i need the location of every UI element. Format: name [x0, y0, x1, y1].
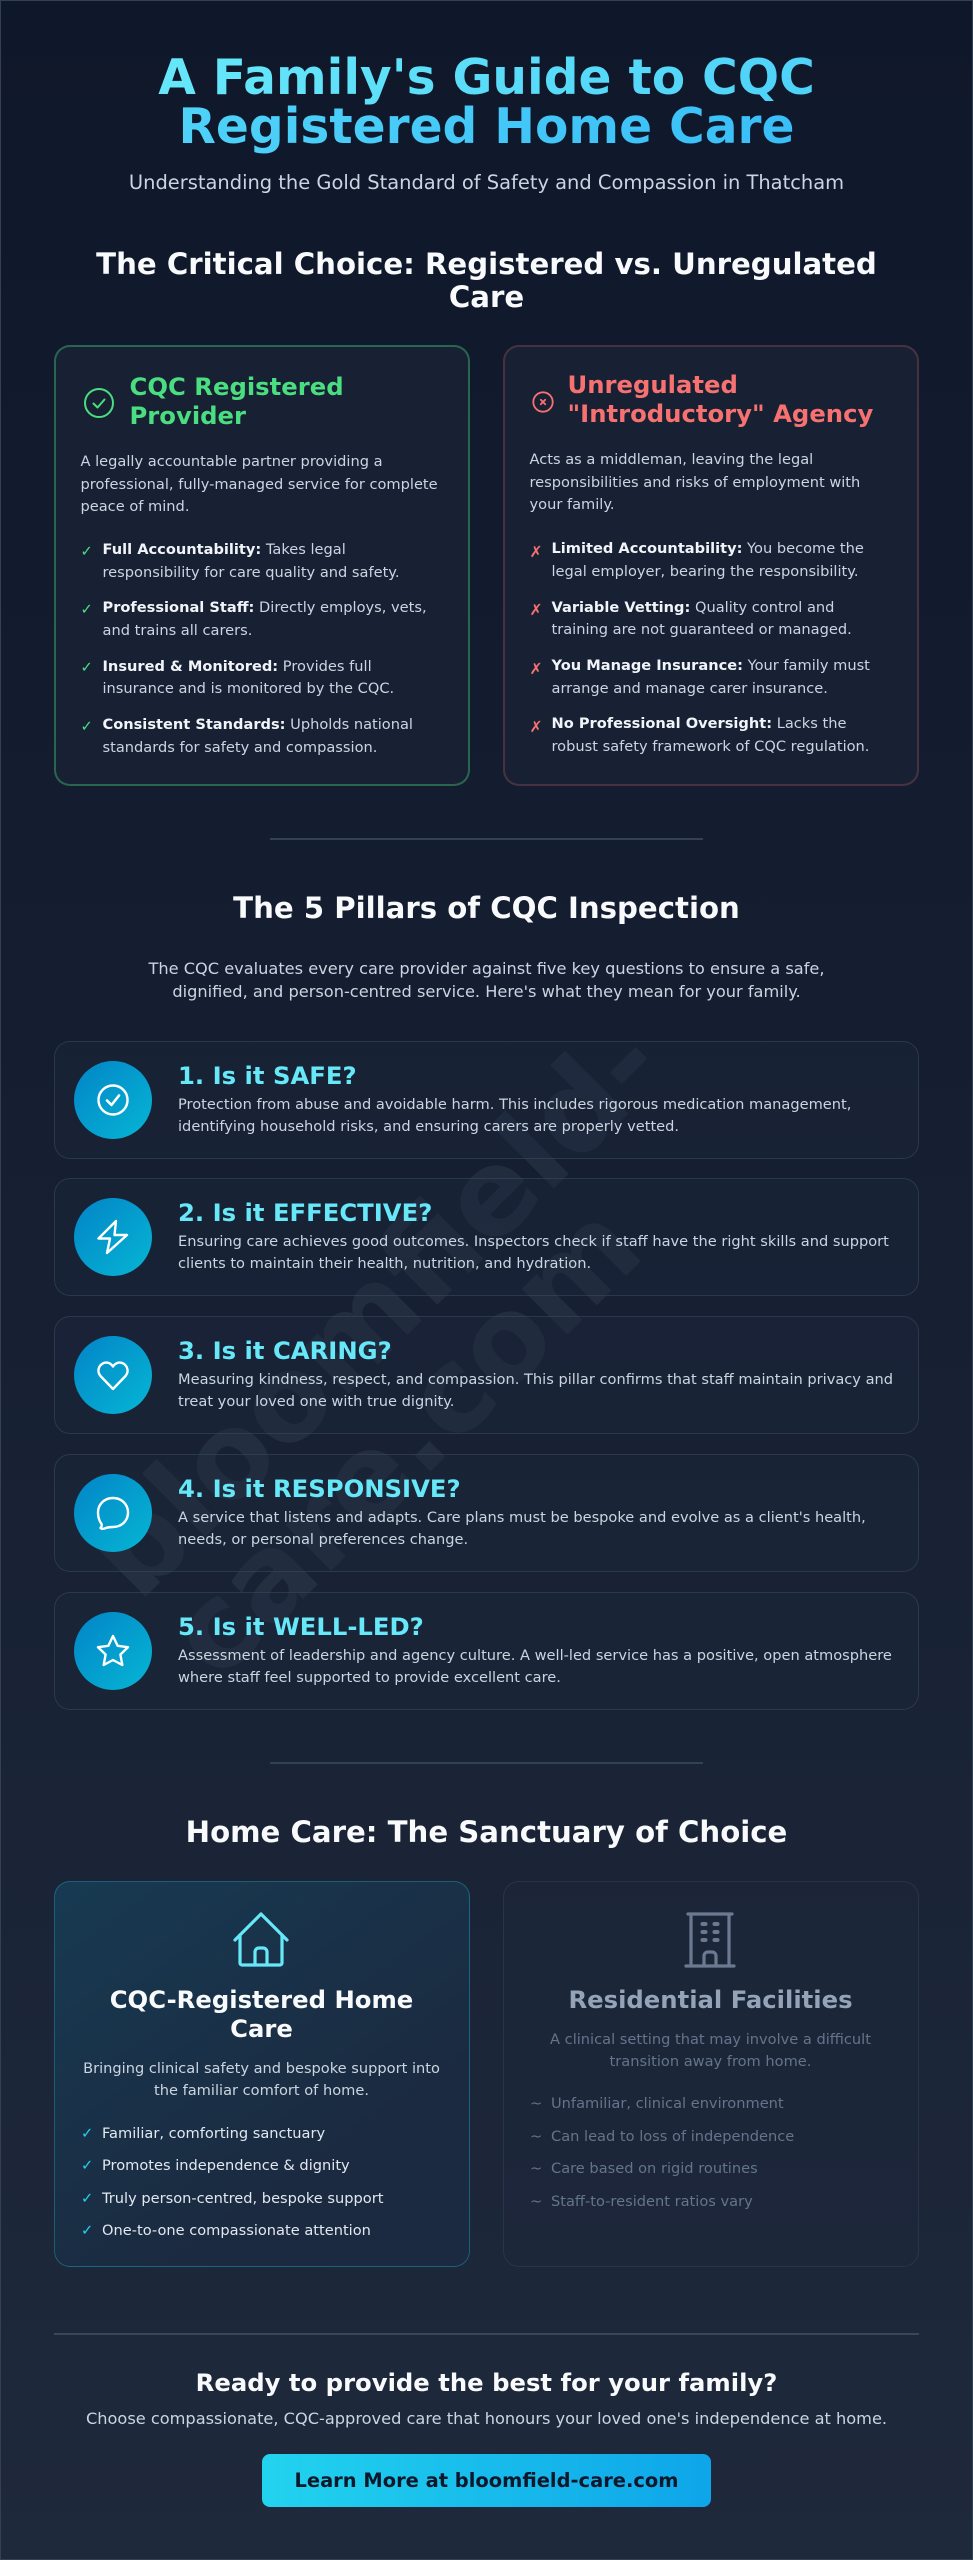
CTA subtext: Choose compassionate, CQC-approved care that honours your loved one's independence at home.: [86, 2408, 887, 2428]
cross list: [530, 540, 870, 755]
benefits list: [81, 2125, 384, 2239]
heading: the critical choice: Care: [449, 280, 524, 314]
pillar description: Measuring kindness, respect, and compassion. This pillar confirms that staff maintain privacy and: [178, 1370, 893, 1388]
panel: CQC registered provider: [54, 345, 470, 786]
list text: Unfamiliar, clinical environment: [551, 2095, 784, 2112]
panel heading: [130, 372, 344, 430]
watermark: bloomfield-: [61, 994, 690, 1623]
list text: and trains all carers.: [102, 622, 252, 639]
call to action: [86, 2368, 887, 2507]
list text: Can lead to loss of independence: [551, 2128, 794, 2145]
list item: ✗: [530, 660, 542, 678]
list item: ✓: [80, 601, 93, 618]
icon: heart: [74, 1336, 152, 1414]
heading: the 5 pillars: The 5 Pillars of CQC Inspection: [233, 890, 740, 924]
pillar description: Assessment of leadership and agency culture. A well-led service has a positive, open atmosphere: [178, 1646, 892, 1664]
list text: [102, 599, 427, 639]
panel description: [83, 2060, 440, 2099]
list text: [102, 716, 413, 756]
list text: [552, 715, 869, 755]
list text: insurance and is monitored by the CQC.: [102, 680, 394, 697]
intro text: [148, 958, 825, 1000]
list text: Full Accountability: Takes legal: [102, 541, 346, 558]
list item: ✓: [81, 2157, 93, 2174]
panel: pillar 4 responsive: [54, 1454, 919, 1572]
panel description: responsibilities and risks of employment with: [530, 474, 860, 491]
list item: ✓: [80, 543, 93, 560]
list item: ✗: [530, 601, 542, 619]
list item: ~: [530, 2128, 542, 2145]
title: [158, 50, 815, 155]
panel: CQC-registered home care: [54, 1881, 470, 2267]
panel heading: CQC-Registered Home: [110, 1985, 413, 2014]
list text: Consistent Standards: Upholds national: [102, 716, 413, 733]
icon: house: [233, 1912, 289, 1967]
list text: Truly person-centred, bespoke support: [102, 2190, 383, 2207]
heading: home care: Home Care: The Sanctuary of Choice: [186, 1814, 787, 1848]
panel: pillar 1 safe: [54, 1041, 919, 1159]
icon: check circle: [74, 1061, 152, 1139]
heading: the critical choice: [96, 246, 877, 314]
intro text: The CQC evaluates every care provider against five key questions to ensure a safe,: [148, 958, 825, 978]
panel: pillar 5 well-led: [54, 1592, 919, 1710]
pillar title: 3. Is it CARING?: [178, 1336, 392, 1364]
list text: Limited Accountability: You become the: [552, 540, 864, 557]
list text: legal employer, bearing the responsibility.: [552, 563, 858, 580]
watermark: care.com: [141, 1177, 667, 1703]
panel heading: Provider: [130, 400, 246, 430]
list item: ✓: [81, 2125, 93, 2142]
panel heading: CQC Registered: [130, 372, 344, 400]
icon: green check circle: [84, 388, 114, 418]
panel description: [80, 453, 438, 515]
pillar description: [178, 1232, 889, 1272]
panel heading: Care: [230, 2014, 293, 2043]
list text: [102, 658, 394, 697]
CTA heading: Ready to provide the best for your family?: [196, 2368, 777, 2396]
pillar title: 2. Is it EFFECTIVE?: [178, 1198, 432, 1226]
pillar description: Ensuring care achieves good outcomes. Inspectors check if staff have the right skills and support: [178, 1232, 889, 1250]
list item: ~: [530, 2160, 542, 2177]
list text: Variable Vetting: Quality control and: [552, 598, 834, 616]
list item: ~: [530, 2095, 542, 2112]
panel heading: [110, 1985, 413, 2043]
check list: [80, 541, 427, 756]
icon: speech bubble: [74, 1474, 152, 1552]
list text: responsibility for care quality and safety.: [102, 564, 400, 581]
list item: ✗: [530, 543, 542, 561]
list item: ✓: [81, 2222, 93, 2239]
pillar description: A service that listens and adapts. Care plans must be bespoke and evolve as a client's health,: [178, 1508, 866, 1526]
panel description: peace of mind.: [80, 498, 189, 515]
pillar description: clients to maintain their health, nutrition, and hydration.: [178, 1255, 591, 1272]
pillar description: [178, 1370, 893, 1410]
panel description: professional, fully-managed service for complete: [80, 476, 438, 493]
list text: Promotes independence & dignity: [102, 2157, 350, 2174]
list item: ✓: [80, 659, 93, 676]
pillar description: [178, 1096, 851, 1135]
pillar description: Protection from abuse and avoidable harm. This includes rigorous medication management,: [178, 1096, 851, 1112]
list text: Insured & Monitored: Provides full: [102, 658, 372, 674]
panel description: transition away from home.: [610, 2053, 811, 2070]
list text: One-to-one compassionate attention: [102, 2222, 371, 2239]
panel heading: [568, 370, 873, 428]
pillar description: identifying household risks, and ensuring carers are properly vetted.: [178, 1118, 679, 1135]
list item: ✓: [81, 2190, 93, 2207]
pillar description: [178, 1508, 866, 1548]
list text: standards for safety and compassion.: [102, 739, 377, 756]
list text: Staff-to-resident ratios vary: [551, 2193, 753, 2210]
pillar description: needs, or personal preferences change.: [178, 1531, 468, 1548]
title: A Family's Guide to CQC: [158, 50, 815, 106]
panel: pillar 3 caring: [54, 1316, 919, 1434]
panel description: Bringing clinical safety and bespoke support into: [83, 2060, 440, 2076]
heading: the critical choice: The Critical Choice: Registered vs. Unregulated: [96, 246, 877, 280]
pillar description: [178, 1646, 892, 1686]
panel: unregulated agency: [503, 345, 919, 786]
panel description: [530, 451, 860, 513]
list text: [551, 657, 870, 697]
pillar description: treat your loved one with true dignity.: [178, 1393, 454, 1410]
intro text: dignified, and person-centred service. Here's what they mean for your family.: [172, 982, 801, 1000]
title: Registered Home Care: [178, 99, 795, 155]
icon: star: [74, 1612, 152, 1690]
list text: [552, 598, 852, 638]
icon: red x circle: [532, 391, 554, 413]
list item: ✗: [530, 718, 542, 736]
CTA button: Learn More at bloomfield-care.com: [294, 2469, 678, 2492]
list item: ✓: [80, 718, 93, 735]
panel description: A legally accountable partner providing a: [80, 453, 383, 470]
list text: Care based on rigid routines: [551, 2160, 758, 2177]
list text: You Manage Insurance: Your family must: [552, 657, 870, 674]
CTA button: [262, 2454, 711, 2507]
list item: ~: [530, 2193, 542, 2210]
panel heading: "Introductory" Agency: [568, 399, 873, 428]
list text: arrange and manage carer insurance.: [552, 680, 828, 697]
list text: Professional Staff: Directly employs, vets,: [102, 599, 427, 616]
pillar title: 5. Is it WELL-LED?: [178, 1612, 424, 1640]
list text: robust safety framework of CQC regulation.: [552, 738, 869, 755]
panel: pillar 2 effective: [54, 1178, 919, 1296]
panel description: [550, 2030, 871, 2070]
subtitle: Understanding the Gold Standard of Safety and Compassion in Thatcham: [129, 171, 844, 194]
pillar title: 4. Is it RESPONSIVE?: [178, 1474, 461, 1502]
panel: residential facilities: [503, 1881, 919, 2267]
panel description: Acts as a middleman, leaving the legal: [530, 451, 813, 468]
icon: lightning bolt: [74, 1198, 152, 1276]
list text: Familiar, comforting sanctuary: [102, 2125, 325, 2142]
panel description: the familiar comfort of home.: [154, 2082, 369, 2099]
list text: training are not guaranteed or managed.: [552, 621, 852, 638]
pillar title: 1. Is it SAFE?: [178, 1060, 357, 1090]
panel heading: Residential Facilities: [568, 1985, 853, 2014]
pillar description: where staff feel supported to provide excellent care.: [178, 1669, 561, 1686]
list text: [552, 540, 864, 580]
panel description: A clinical setting that may involve a difficult: [550, 2030, 871, 2048]
drawbacks list: [530, 2095, 794, 2210]
list text: [102, 541, 400, 581]
panel description: your family.: [530, 496, 615, 513]
panel heading: Unregulated: [568, 370, 738, 399]
list text: No Professional Oversight: Lacks the: [552, 715, 846, 732]
icon: building: [684, 1912, 736, 1968]
